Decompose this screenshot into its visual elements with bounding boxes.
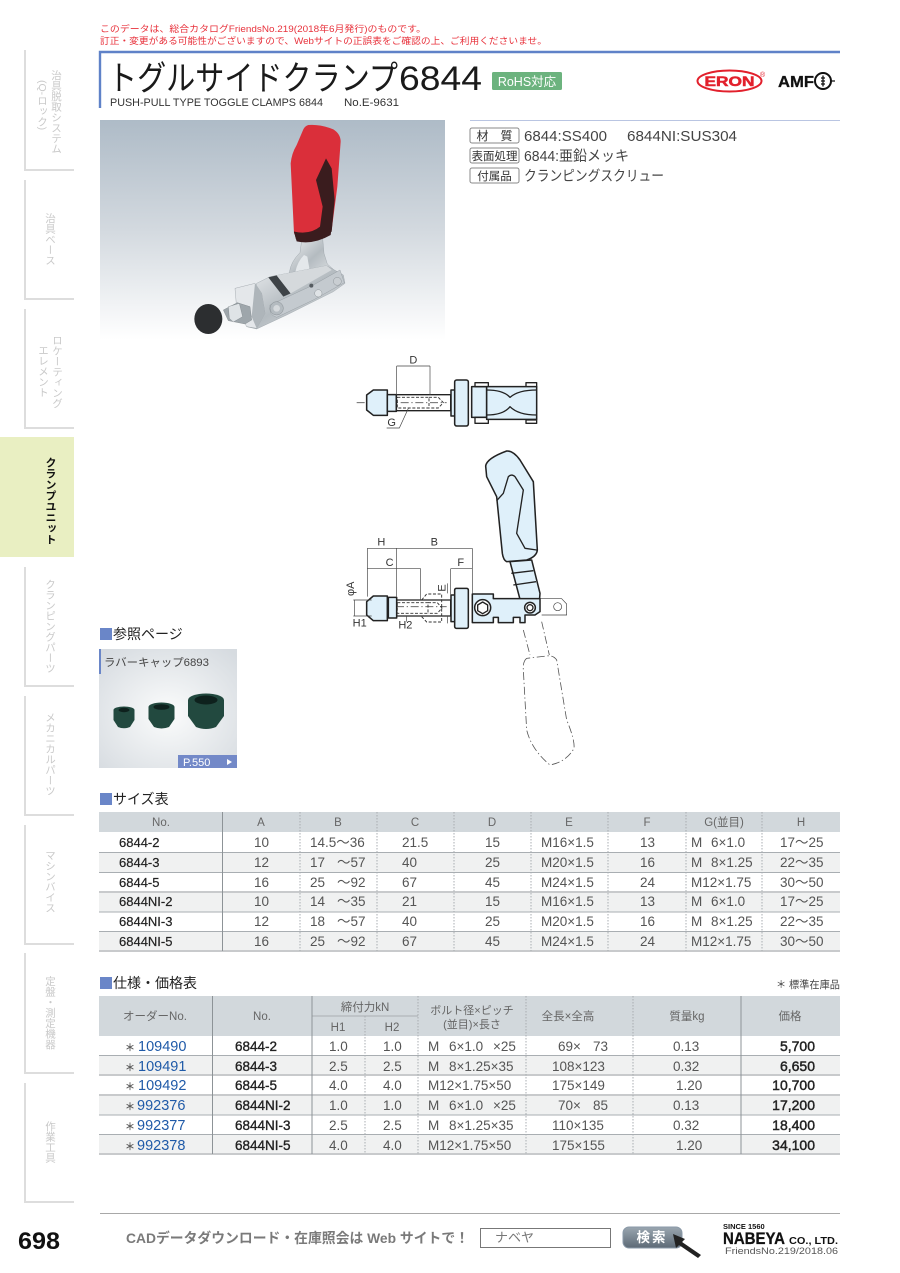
spec: 付属品: 付属品 — [477, 170, 512, 183]
row 992376: M — [428, 1098, 439, 1113]
title block — [100, 52, 840, 109]
spec: 材質 — [470, 128, 737, 145]
row 992378: 4.0 — [329, 1138, 348, 1153]
notice text in red: このデータは、総合カタログFriendsNo.219(2018年6月発行)のものです。 — [100, 23, 426, 34]
footer CAD message: CADデータダウンロード・在庫照会は Web サイトで！ — [126, 1230, 469, 1246]
row 6844NI-5: M24×1.5 — [541, 934, 594, 949]
row 6844-3: 16 — [640, 855, 655, 870]
row 109492: 1.20 — [676, 1078, 702, 1093]
row 992376: 70× — [558, 1098, 581, 1113]
row 6844NI-5: 24 — [640, 934, 656, 949]
size table header: H — [797, 817, 805, 829]
tab: 作業工具 — [25, 1083, 74, 1202]
row 109490: 73 — [593, 1039, 608, 1054]
tab: 作業工具: 作業工具 — [44, 1121, 56, 1164]
tab: 定盤・測定機器: 定盤・測定機器 — [44, 976, 56, 1050]
dim labels H B: H — [377, 537, 385, 549]
tab: クランプユニット (active) — [0, 437, 74, 557]
logo: ERON: ERON — [704, 74, 754, 89]
dim labels H1 H2: H1 — [353, 618, 367, 630]
spec table header: 締付力kN — [341, 1000, 389, 1014]
row 109490: 109490 — [138, 1039, 186, 1055]
dim labels C F: C — [386, 557, 394, 569]
row 6844-2: M16×1.5 — [541, 835, 594, 850]
row 6844-2: 6×1.0 — [711, 835, 745, 850]
row 6844-2: 13 — [640, 835, 655, 850]
tab: マシンバイス — [25, 825, 74, 944]
row 109490: 1.0 — [383, 1039, 402, 1054]
spec table header: 価格 — [778, 1009, 802, 1023]
reference card: rubber cap — [99, 649, 237, 769]
row 6844NI-3: 18 — [310, 914, 325, 929]
row 6844NI-2: 6844NI-2 — [119, 894, 172, 909]
notice text in red: 訂正・変更がある可能性がございますので、Webサイトの正誤表をご確認の上、ご利用くださいませ。 — [100, 35, 547, 46]
row 992378: ＊ — [125, 1142, 135, 1153]
tab: マシンバイス: マシンバイス — [44, 850, 56, 913]
row 992377: 6844NI-3 — [235, 1118, 291, 1133]
size table header: C — [411, 817, 419, 829]
spec: 材質: 材 質 — [476, 128, 513, 143]
spec: 表面処理: 表面処理 — [472, 149, 518, 163]
row 109490: 6844-2 — [235, 1039, 277, 1054]
dim label phi A: φA — [345, 581, 357, 596]
row 992378: 4.0 — [383, 1138, 402, 1153]
size table header: B — [334, 817, 342, 829]
title: 6844 — [399, 60, 482, 98]
row 992378 — [125, 1137, 815, 1154]
row 6844-2: M — [691, 835, 702, 850]
row 6844-5: 67 — [402, 875, 417, 890]
tab: ロケーティングエレメント: エレメント — [37, 345, 49, 398]
row 992376 — [125, 1097, 815, 1114]
row 6844NI-5: 16 — [254, 934, 269, 949]
row 6844NI-5: 6844NI-5 — [119, 934, 172, 949]
row 992376: 1.0 — [383, 1098, 402, 1113]
tab: 治具脱取システム: (Q-ロック) — [36, 80, 48, 130]
row 6844-5: 24 — [640, 875, 656, 890]
row 6844NI-2 — [119, 894, 824, 909]
spec and price table — [99, 996, 840, 1154]
row 6844NI-5: M12×1.75 — [691, 934, 751, 949]
row 109492: ＊ — [125, 1082, 135, 1093]
row 109492: M12×1.75×50 — [428, 1078, 511, 1093]
row 6844NI-5: 45 — [485, 934, 500, 949]
logo: AMF: AMF — [778, 74, 814, 91]
row 109490: 6×1.0 — [449, 1039, 483, 1054]
company logo — [723, 1222, 838, 1257]
row 992376: ＊ — [125, 1102, 135, 1113]
title: トグルサイドクランプ — [108, 60, 398, 98]
page number: 698 — [18, 1228, 60, 1255]
row 992377: 2.5 — [383, 1118, 402, 1133]
section heading: size table: サイズ表 — [113, 791, 169, 807]
row 992376: ×25 — [493, 1098, 516, 1113]
row 6844-2: 6844-2 — [119, 835, 159, 850]
tab: 治具脱取システム: 治具脱取システム — [50, 69, 62, 154]
row 6844NI-3: 12 — [254, 914, 269, 929]
row 6844-5: 16 — [254, 875, 269, 890]
row 6844NI-3: 25 — [485, 914, 500, 929]
row 6844NI-3: 22～35 — [780, 914, 824, 929]
spec table header: 質量kg — [669, 1009, 705, 1023]
tab: 治具脱取システム — [25, 50, 74, 170]
row 109490: ＊ — [125, 1043, 135, 1054]
row 6844NI-2: M — [691, 894, 702, 909]
row 6844-5: 25 — [310, 875, 325, 890]
row 6844-2: 14.5～36 — [310, 835, 365, 850]
spec: 材質: 6844:SS400 — [524, 129, 607, 145]
row 6844-3: 22～35 — [780, 855, 824, 870]
row 992377: 8×1.25×35 — [449, 1118, 514, 1133]
row 109491: 2.5 — [383, 1059, 402, 1074]
row 6844NI-2: 13 — [640, 894, 655, 909]
material and finish specs — [470, 120, 840, 185]
row 6844NI-3: 40 — [402, 914, 417, 929]
logo: ERON — [698, 70, 766, 92]
tab: メカニカルパーツ: メカニカルパーツ — [44, 712, 56, 796]
row 6844NI-5 — [119, 934, 824, 949]
row 6844-3: 12 — [254, 855, 269, 870]
row 6844-2: 15 — [485, 835, 500, 850]
row 6844-3 — [119, 855, 824, 870]
tab: クランプユニット (active): クランプユニット — [44, 457, 56, 545]
subtitle: PUSH-PULL TYPE TOGGLE CLAMPS 6844 — [110, 97, 323, 109]
company logo: CO., LTD. — [789, 1236, 838, 1247]
card label: ラバーキャップ6893 — [104, 656, 209, 669]
row 109491: 6844-3 — [235, 1059, 277, 1074]
size table header — [152, 815, 805, 829]
spec table header: 全長×全高 — [542, 1009, 594, 1023]
row 6844NI-5: 67 — [402, 934, 417, 949]
notice text in red — [100, 23, 547, 46]
spec: 材質: 6844NI:SUS304 — [627, 129, 737, 145]
row 6844-2: 21.5 — [402, 835, 428, 850]
spec table header: ボルト径×ピッチ — [430, 1004, 514, 1017]
dim labels H B: B — [431, 537, 438, 549]
tab: ロケーティングエレメント — [25, 309, 74, 428]
row 6844-3: M — [691, 855, 702, 870]
row 109491: 0.32 — [673, 1059, 699, 1074]
row 992376: 17,200 — [772, 1097, 815, 1113]
search box — [480, 1228, 610, 1248]
page link tag: P.550 — [183, 757, 210, 769]
row 6844NI-2: 10 — [254, 894, 269, 909]
icon: cursor arrow — [673, 1234, 701, 1258]
company logo: NABEYA — [723, 1229, 785, 1248]
search button with cursor — [623, 1227, 701, 1258]
row 6844NI-3: M — [691, 914, 702, 929]
row 992376: 6×1.0 — [449, 1098, 483, 1113]
row 6844-5: 6844-5 — [119, 875, 159, 890]
row 6844NI-3: 6844NI-3 — [119, 914, 172, 929]
row 992378: 175×155 — [552, 1138, 605, 1153]
technical drawing: top view — [357, 354, 537, 429]
spec: 表面処理 — [470, 148, 629, 165]
row 6844NI-3 — [119, 914, 824, 929]
row 109492: 6844-5 — [235, 1078, 277, 1093]
RoHS badge: RoHS対応 — [498, 75, 557, 89]
spec table header: オーダーNo. — [123, 1009, 187, 1023]
row 109490: ×25 — [493, 1039, 516, 1054]
row 109492: 4.0 — [329, 1078, 348, 1093]
row 6844NI-2: 6×1.0 — [711, 894, 745, 909]
row 109490: 1.0 — [329, 1039, 348, 1054]
row 6844-5: M24×1.5 — [541, 875, 594, 890]
row 109490: 5,700 — [780, 1038, 815, 1054]
row 109492: 109492 — [138, 1078, 186, 1094]
row 109490: 69× — [558, 1039, 581, 1054]
row 109491: 2.5 — [329, 1059, 348, 1074]
spec table header: (並目)×長さ — [443, 1017, 501, 1031]
row 6844-2: 10 — [254, 835, 269, 850]
tab: クランピングパーツ: クランピングパーツ — [44, 579, 56, 674]
spec: 表面処理: 6844:亜鉛メッキ — [524, 148, 629, 165]
row 6844-2 — [119, 835, 824, 850]
row 992377: 18,400 — [772, 1117, 815, 1133]
row 6844NI-3: M20×1.5 — [541, 914, 594, 929]
rubber cap photos — [114, 694, 224, 729]
dim label D: D — [409, 354, 417, 366]
technical drawing: side view with dimensions — [345, 451, 574, 765]
tab: ロケーティングエレメント: ロケーティング — [51, 335, 63, 408]
row 6844NI-2: 15 — [485, 894, 500, 909]
tab: 治具ベース: 治具ベース — [44, 212, 56, 266]
row 6844-5 — [119, 875, 824, 890]
row 992376: 1.0 — [329, 1098, 348, 1113]
dim labels H1 H2: H2 — [398, 619, 412, 631]
spec table header — [123, 1000, 802, 1034]
row 6844NI-5: ～92 — [337, 934, 366, 949]
subtitle: No.E-9631 — [344, 97, 399, 109]
row 6844NI-5: 30～50 — [780, 934, 824, 949]
row 992378: 34,100 — [772, 1137, 815, 1153]
row 6844-5: ～92 — [337, 875, 366, 890]
search button with cursor: 検索 — [636, 1229, 668, 1245]
row 6844NI-3: 8×1.25 — [711, 914, 753, 929]
spec: 付属品 — [470, 168, 664, 185]
row 6844-3: 40 — [402, 855, 417, 870]
row 109491: M — [428, 1059, 439, 1074]
row 109491 — [125, 1058, 815, 1075]
tab: クランピングパーツ — [25, 567, 74, 686]
row 6844NI-2: M16×1.5 — [541, 894, 594, 909]
size table header: E — [565, 817, 573, 829]
row 992376: 0.13 — [673, 1098, 699, 1113]
row 992378: M12×1.75×50 — [428, 1138, 511, 1153]
row 109492: 4.0 — [383, 1078, 402, 1093]
row 6844-5: 45 — [485, 875, 500, 890]
row 109492: 10,700 — [772, 1077, 815, 1093]
row 109490: 0.13 — [673, 1039, 699, 1054]
section heading: reference page: 参照ページ — [113, 626, 183, 642]
spec table header: H2 — [385, 1022, 399, 1034]
company logo: SINCE 1560 — [723, 1222, 765, 1231]
row 6844NI-3: 16 — [640, 914, 655, 929]
row 992376: 85 — [593, 1098, 608, 1113]
row 6844-2: 17～25 — [780, 835, 824, 850]
row 6844-5: M12×1.75 — [691, 875, 751, 890]
row 992377: 0.32 — [673, 1118, 699, 1133]
row 6844-3: 25 — [485, 855, 500, 870]
row 992377: 110×135 — [552, 1118, 604, 1133]
row 109491: 6,650 — [780, 1058, 815, 1074]
row 6844NI-2: ～35 — [337, 894, 366, 909]
search box: ナベヤ — [495, 1230, 534, 1245]
RoHS badge — [492, 72, 562, 90]
row 6844NI-2: 21 — [402, 894, 417, 909]
logo: AMF — [778, 73, 835, 91]
row 6844-3: 8×1.25 — [711, 855, 753, 870]
row 992377: 992377 — [137, 1118, 185, 1134]
company logo: FriendsNo.219/2018.06 — [725, 1246, 838, 1257]
dim label G: G — [387, 417, 396, 429]
handle — [486, 451, 537, 562]
row 109490 — [125, 1038, 815, 1055]
dim labels C F: F — [457, 557, 464, 569]
row 6844NI-2: 14 — [310, 894, 326, 909]
row 109492: 175×149 — [552, 1078, 605, 1093]
tab: 治具ベース — [25, 180, 74, 299]
row 6844NI-5: 25 — [310, 934, 325, 949]
size table header: F — [643, 817, 651, 829]
dim label E: E — [437, 584, 449, 592]
row 6844-3: ～57 — [337, 855, 366, 870]
row 992377: ＊ — [125, 1122, 135, 1133]
row 109491: 108×123 — [552, 1059, 605, 1074]
row 6844-3: 17 — [310, 855, 325, 870]
row 992377 — [125, 1117, 815, 1134]
spec table header: No. — [253, 1011, 271, 1023]
row 109490: M — [428, 1039, 439, 1054]
row 992377: 2.5 — [329, 1118, 348, 1133]
row 6844-3: M20×1.5 — [541, 855, 594, 870]
row 6844NI-2: 17～25 — [780, 894, 824, 909]
row 109492 — [125, 1077, 815, 1094]
spec table header: H1 — [331, 1022, 345, 1034]
size table header: D — [488, 817, 496, 829]
tab: メカニカルパーツ — [25, 696, 74, 815]
logo: ERON: ® — [760, 71, 766, 79]
size table header: No. — [152, 817, 170, 829]
row 992376: 6844NI-2 — [235, 1098, 291, 1113]
section heading: spec and price table: 仕様・価格表 — [113, 975, 197, 991]
row 992378: 1.20 — [676, 1138, 702, 1153]
row 109491: 8×1.25×35 — [449, 1059, 514, 1074]
size table — [99, 812, 840, 951]
product photo: toggle clamp — [100, 120, 445, 340]
row 109491: 109491 — [138, 1059, 186, 1075]
stock note: ＊ 標準在庫品 — [776, 978, 840, 991]
row 6844-5: 30～50 — [780, 875, 824, 890]
row 992378: 992378 — [137, 1138, 185, 1154]
spec: 付属品: クランピングスクリュー — [524, 168, 664, 185]
row 109491: ＊ — [125, 1063, 135, 1074]
row 6844-3: 6844-3 — [119, 855, 159, 870]
row 992376: 992376 — [137, 1098, 185, 1114]
tab: 定盤・測定機器 — [25, 953, 74, 1073]
size table header: G(並目) — [704, 815, 744, 829]
row 992377: M — [428, 1118, 439, 1133]
phantom handle — [523, 622, 574, 765]
row 992378: 6844NI-5 — [235, 1138, 291, 1153]
row 6844NI-3: ～57 — [337, 914, 366, 929]
sidebar navigation tabs — [0, 50, 74, 1202]
size table header: A — [257, 817, 265, 829]
